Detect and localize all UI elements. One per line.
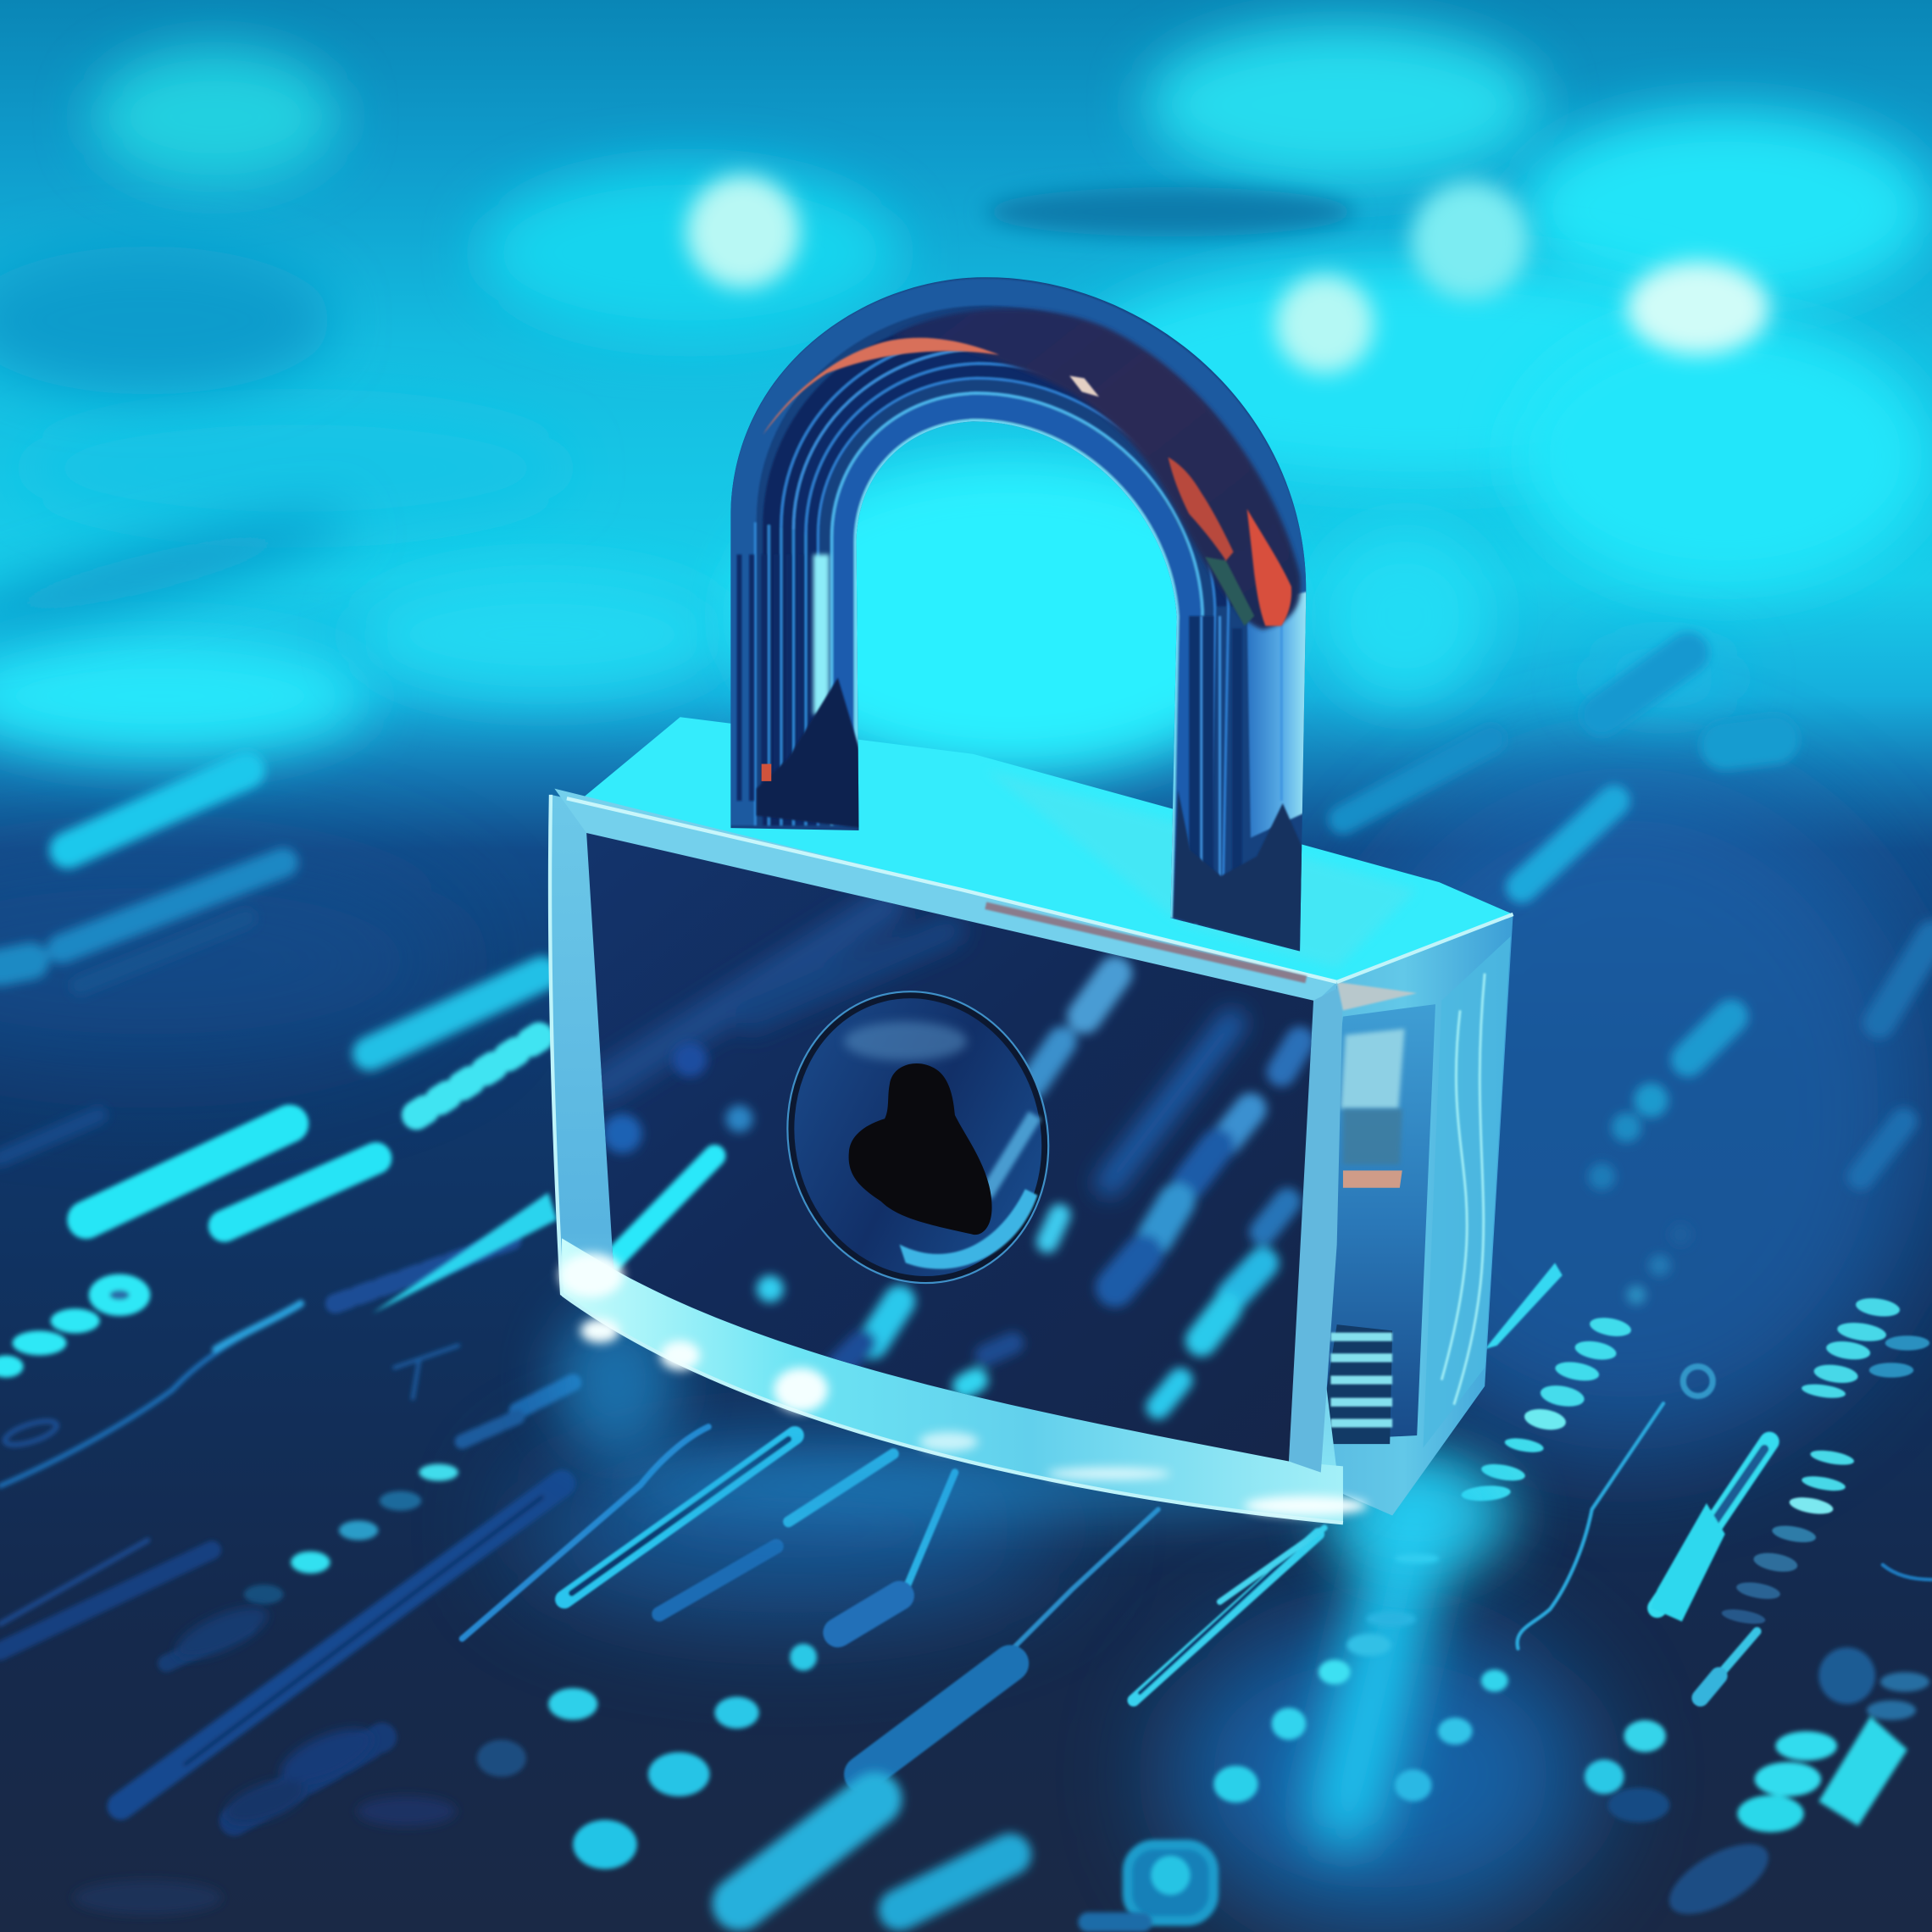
foreground blurred bars — [739, 1799, 1213, 1932]
lower-right tile cluster — [1608, 1647, 1929, 1928]
left data dashes — [0, 1035, 573, 1821]
under-lock circuit lines — [462, 1263, 1563, 1774]
left leg bright stripe — [813, 554, 830, 714]
bright spike beside lock — [372, 1193, 557, 1313]
keyhole ring — [757, 963, 1079, 1311]
shackle — [714, 265, 1319, 967]
front rim highlight — [550, 795, 1513, 1523]
dark front face — [586, 833, 1313, 1462]
right data dashes — [1461, 1296, 1929, 1626]
blurred cyan background lights — [0, 25, 1932, 776]
top rim glass — [554, 789, 1337, 1004]
red highlights — [763, 338, 1291, 626]
lock floor glow — [554, 1306, 1516, 1577]
glowing dots — [477, 1554, 1666, 1869]
dim navy foreground shapes — [74, 1596, 456, 1915]
floor blue ambient tones — [0, 764, 1932, 1929]
soft glow dashes, upper mid-ground — [0, 653, 1932, 1305]
reflections on front face — [602, 906, 1300, 1407]
top surface sparkle texture — [985, 770, 1417, 967]
bottom glass rim — [562, 1238, 1343, 1523]
left leg dark reflection — [757, 678, 860, 828]
glass top surface — [579, 717, 1513, 985]
padlock right side — [1294, 914, 1513, 1516]
keyhole — [849, 1063, 992, 1235]
vertical light beam below lock corner — [1346, 1509, 1417, 1812]
right leg dark reflection — [1173, 790, 1303, 952]
glass front frame — [550, 795, 1343, 1522]
padlock — [550, 265, 1513, 1523]
maroon reflection on arch — [892, 308, 1301, 630]
right leg highlights — [1247, 591, 1308, 838]
right front bezel — [1289, 985, 1343, 1473]
bright bokeh spots — [686, 175, 1769, 374]
right glass bar and wire — [1518, 1367, 1932, 1698]
glowing small tiles, left — [244, 1463, 458, 1604]
